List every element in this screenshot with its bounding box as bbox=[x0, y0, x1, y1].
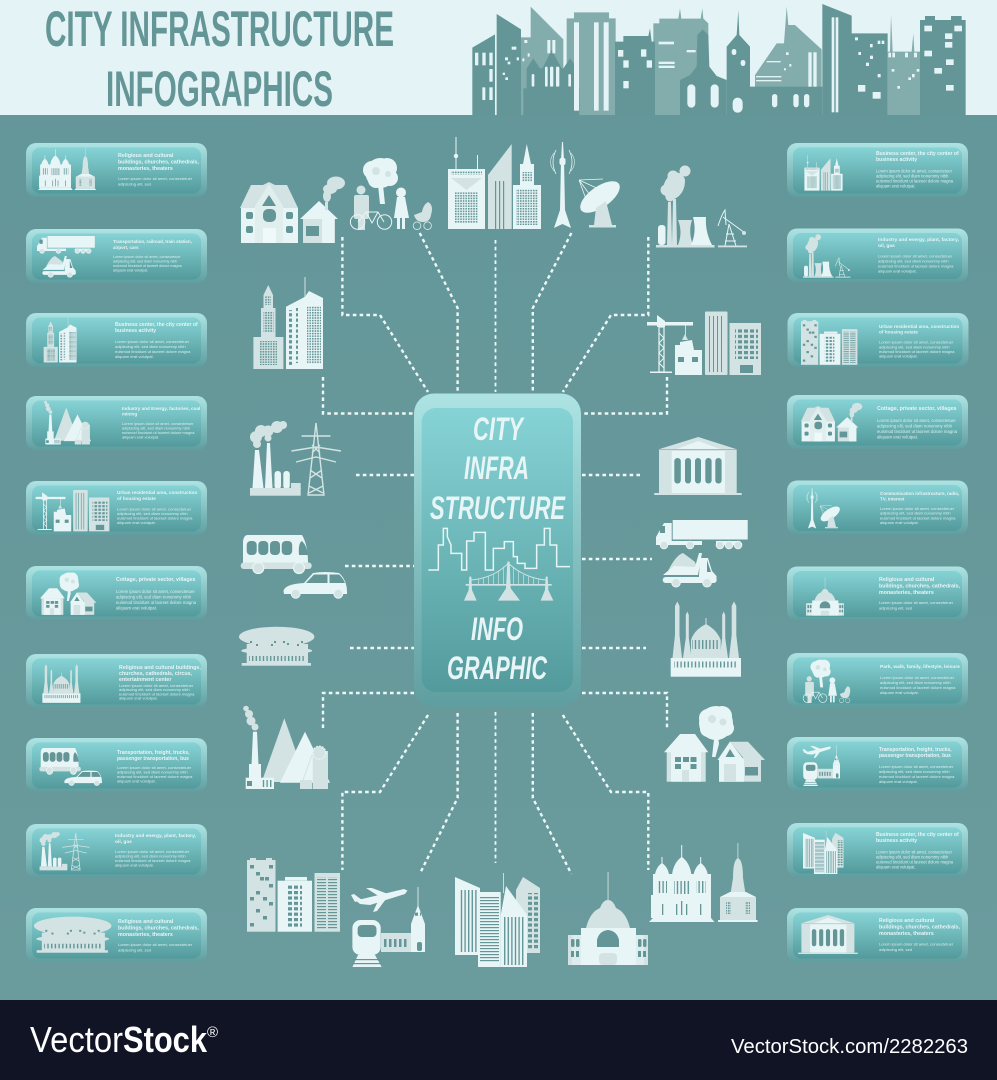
panel text: euismod tincidunt ut laoreet dolore magna bbox=[876, 860, 954, 864]
icon: temple bbox=[798, 915, 858, 954]
panel text: Lorem ipsum dolor sit amet, consectetuer bbox=[118, 176, 193, 181]
panel text: Lorem ipsum dolor sit amet, consectetuer bbox=[119, 683, 194, 688]
icon: cottage bbox=[801, 403, 862, 441]
panel text bbox=[113, 239, 192, 272]
icon: bus bbox=[241, 535, 312, 574]
panel text: Lorem ipsum dolor sit amet, consectetuer bbox=[878, 254, 953, 258]
icon: churches bbox=[649, 843, 758, 922]
panel text: aliquam erat volutpat. bbox=[115, 354, 154, 359]
icon: suspension bridge bbox=[464, 562, 553, 601]
panel text: Park, walk, family, lifestyle, leisure bbox=[880, 664, 960, 670]
panel: right 2 industry bbox=[787, 228, 968, 282]
panel text: euismod tincidunt ut laoreet dolore magna bbox=[113, 264, 183, 268]
panel text: Lorem ipsum dolor sit amet, consectetuer bbox=[880, 675, 955, 680]
panel text: Lorem ipsum dolor sit amet, consectetuer bbox=[879, 764, 954, 769]
icon: bus bbox=[39, 748, 81, 774]
panel text: euismod tincidunt ut laoreet dolore magna bbox=[117, 774, 193, 779]
icon: freight truck bbox=[37, 236, 95, 253]
title: INFOGRAPHICS bbox=[106, 61, 333, 117]
central heading text bbox=[430, 411, 566, 526]
footer bar bbox=[0, 1000, 997, 1080]
panel text: Industry and energy, plant, factory, bbox=[115, 833, 196, 839]
panel: left 1 religious bbox=[26, 143, 207, 197]
panel text bbox=[876, 832, 959, 870]
footer logo: ® bbox=[207, 1024, 218, 1041]
panel text: Lorem ipsum dolor sit amet, consectetuer bbox=[880, 506, 955, 511]
panel: right 8 transportation bbox=[787, 737, 968, 791]
panel text: euismod tincidunt ut laoreet dolore magna bbox=[877, 429, 958, 434]
panel text: adipiscing elit, sed diam nonummy nibh bbox=[116, 594, 192, 600]
footer logo: VectorStock bbox=[30, 1019, 221, 1060]
central subheading text: INFO bbox=[471, 611, 523, 647]
panel text: Industry and Energy, factories, coal bbox=[122, 406, 200, 411]
panel text bbox=[880, 664, 960, 695]
panel text: aliquam erat volutpat. bbox=[113, 268, 148, 272]
panel text: Urban residential area, construction bbox=[117, 490, 197, 495]
panel: right 9 business bbox=[787, 823, 968, 877]
panel text: euismod tincidunt ut laoreet dolore magna bbox=[122, 430, 195, 435]
panel text bbox=[117, 750, 193, 784]
panel text: business activity bbox=[115, 328, 156, 334]
panel text bbox=[880, 491, 959, 525]
icon: car bbox=[284, 572, 347, 598]
icon: plant and oil pump bbox=[656, 166, 747, 248]
panel text: aliquam erat volutpat. bbox=[119, 696, 158, 701]
panel text: passenger transportation, bus bbox=[879, 753, 951, 759]
panel text bbox=[119, 665, 201, 701]
panel: right 3 urban residential bbox=[788, 313, 968, 367]
panel text: adipiscing elit, sed diam nonummy nibh bbox=[119, 687, 190, 692]
icon: mosque bbox=[671, 602, 741, 677]
panel text: business activity bbox=[876, 157, 917, 163]
icon: stadium bbox=[239, 627, 314, 666]
panel text: Lorem ipsum dolor sit amet, consectetuer bbox=[113, 255, 181, 259]
panel: left 6 cottage bbox=[26, 566, 207, 620]
panel text: adipiscing elit, sed diam nonummy nibh bbox=[878, 258, 949, 264]
panel text: airport, cars bbox=[113, 245, 139, 250]
panel: right 10 religious bbox=[787, 908, 968, 962]
panel text: adipiscing elit, sed diam nonummy nibh bbox=[117, 511, 188, 516]
panel text: euismod tincidunt ut laoreet dolore magna bbox=[880, 515, 956, 520]
panel text: euismod tincidunt ut laoreet dolore magna bbox=[878, 264, 954, 268]
panel text: adipiscing elit, sed bbox=[118, 182, 151, 186]
header city skyline bbox=[472, 4, 966, 115]
icon: park, family bbox=[803, 660, 850, 703]
panel text: Lorem ipsum dolor sit amet, consectetuer bbox=[876, 168, 953, 174]
panel text: adipiscing elit, sed bbox=[118, 948, 151, 952]
title: CITY INFRASTRUCTURE bbox=[45, 1, 394, 57]
icon: business towers bbox=[804, 155, 843, 191]
panel text bbox=[122, 406, 200, 440]
panel text: adipiscing elit, sed bbox=[879, 947, 912, 952]
panel text bbox=[877, 406, 958, 440]
panel text: aliquam erat volutpat. bbox=[878, 268, 917, 274]
icon: business center towers bbox=[448, 137, 541, 229]
panel text: euismod tincidunt ut laoreet dolore magna bbox=[879, 774, 955, 779]
panel text: adipiscing elit, sed diam nonummy nibh bbox=[122, 426, 190, 430]
panel text: Lorem ipsum dolor sit amet, consectetuer bbox=[879, 942, 954, 946]
panel text: aliquam erat volutpat. bbox=[122, 434, 159, 440]
icon: tall business buildings bbox=[253, 277, 323, 369]
panel text bbox=[116, 577, 197, 610]
panel text: Religious and cultural bbox=[879, 918, 935, 924]
icon: crane and buildings bbox=[36, 490, 109, 531]
panel text bbox=[878, 237, 959, 274]
icon: power plant and pylon bbox=[250, 421, 341, 496]
icon: car bbox=[64, 771, 102, 786]
panel text: Cottage, private sector, villages bbox=[877, 406, 957, 412]
dashed connectors bbox=[323, 233, 667, 874]
panel text: monasteries, theaters bbox=[879, 931, 934, 937]
panel text: adipiscing elit, sed bbox=[879, 606, 912, 610]
panel: left 2 transportation bbox=[26, 229, 207, 283]
panel text bbox=[118, 153, 199, 186]
panel text: euismod tincidunt ut laoreet dolore magna bbox=[119, 691, 195, 696]
panel text: Religious and cultural bbox=[879, 577, 935, 583]
panel: right 7 park bbox=[787, 653, 968, 707]
panel text: monasteries, theaters bbox=[118, 166, 173, 172]
panel text bbox=[118, 919, 199, 952]
icon: communication tower and dish bbox=[806, 488, 842, 529]
panel text: aliquam erat volutpat. bbox=[117, 520, 156, 525]
panel text: adipiscing elit, sed diam nonummy nibh bbox=[879, 769, 950, 774]
panel text: adipiscing elit, sed diam nonummy nibh bbox=[880, 680, 951, 685]
panel text: Lorem ipsum dolor sit amet, consectetuer bbox=[116, 589, 195, 594]
central panel: city infrastructure infographic bbox=[414, 394, 581, 707]
icon: churches bbox=[38, 148, 96, 190]
icon: power plant and pylon bbox=[40, 832, 89, 870]
panel text: adipiscing elit, sed diam nonummy nibh bbox=[115, 854, 186, 858]
panel text: oil, gas bbox=[878, 243, 895, 249]
panel: right 4 cottage bbox=[787, 395, 968, 449]
panel text: Business center, the city center of bbox=[876, 151, 959, 157]
panel: left 3 business bbox=[26, 313, 207, 367]
panel text: entertainment center bbox=[119, 677, 171, 683]
central subheading text bbox=[447, 611, 548, 686]
panel text: Religious and cultural bbox=[118, 919, 174, 925]
panel text: buildings, churches, cathedrals, bbox=[879, 924, 960, 930]
panel text: monasteries, theaters bbox=[118, 932, 173, 938]
icon: stadium bbox=[34, 917, 111, 953]
panel text bbox=[876, 151, 959, 188]
panel text: Religious and cultural buildings, bbox=[119, 665, 201, 671]
panel text: passenger transportation, bus bbox=[117, 756, 189, 762]
panel: left 4 industry bbox=[26, 396, 207, 450]
panel text: Lorem ipsum dolor sit amet, consectetuer bbox=[115, 339, 190, 344]
icon: plant and oil pump bbox=[803, 234, 850, 278]
panel: left 9 industry and energy bbox=[26, 824, 207, 878]
icon: domed hall bbox=[568, 872, 648, 965]
panel text: aliquam erat volutpat. bbox=[880, 520, 919, 525]
icon: plane and train station bbox=[351, 887, 425, 967]
panel text: Lorem ipsum dolor sit amet, consectetuer bbox=[115, 849, 190, 854]
panel text: adipiscing elit, sed diam nonummy nibh bbox=[879, 344, 950, 349]
central heading text: CITY bbox=[473, 411, 525, 447]
panel text: aliquam erat volutpat. bbox=[876, 184, 916, 188]
panel text: euismod tincidunt ut laoreet dolore magna bbox=[117, 516, 193, 520]
icon: skyline outline bbox=[428, 528, 570, 570]
panel text bbox=[115, 322, 198, 359]
panel text: Urban residential area, construction bbox=[879, 324, 959, 329]
panel text bbox=[879, 747, 955, 784]
panel text: euismod tincidunt ut laoreet dolore magna bbox=[880, 685, 956, 690]
panel text: monasteries, theaters bbox=[879, 590, 934, 596]
icon: freight truck bbox=[656, 520, 748, 549]
panel text bbox=[879, 324, 959, 359]
panel text: Lorem ipsum dolor sit amet, consectetuer bbox=[879, 600, 954, 605]
panel text: churches, cathedrals, circus, bbox=[119, 671, 193, 677]
icon: tall business buildings bbox=[44, 317, 77, 363]
panel text: adipiscing elit, sed diam nonummy nibh bbox=[115, 344, 186, 349]
icon: plane and train station bbox=[803, 746, 840, 786]
panel text: aliquam erat volutpat. bbox=[879, 354, 918, 359]
footer image reference: VectorStock.com/2282263 bbox=[731, 1036, 968, 1058]
panel text: buildings, churches, cathedrals, bbox=[879, 584, 960, 590]
panel text: aliquam erat volutpat. bbox=[880, 690, 919, 695]
panel text: Business center, the city center of bbox=[876, 832, 959, 838]
panel text: adipiscing elit, sed diam nonummy nibh bbox=[113, 260, 177, 264]
central heading text: INFRA bbox=[464, 450, 529, 486]
panel text: adipiscing elit, sed diam nonummy nibh bbox=[880, 511, 951, 516]
panel text: Lorem ipsum dolor sit amet, consectetuer bbox=[876, 850, 953, 854]
icon: dump truck bbox=[42, 256, 76, 277]
panel text: euismod tincidunt ut laoreet dolore magna bbox=[116, 600, 197, 605]
icon: park, family with bicycle and pram bbox=[350, 158, 432, 230]
panel: left 7 religious circus bbox=[26, 654, 207, 708]
panel text: Lorem ipsum dolor sit amet, consectetuer bbox=[879, 340, 954, 344]
panel text: oil, gas bbox=[115, 839, 132, 845]
panel: left 8 passenger transport bbox=[26, 738, 207, 792]
icon: dump truck bbox=[663, 553, 717, 587]
panel text: buildings, churches, cathedrals, bbox=[118, 160, 199, 166]
icon: communication tower and dish bbox=[550, 142, 625, 228]
panel text: Transportation, railroad, train station, bbox=[113, 239, 192, 244]
panel: right 1 business bbox=[787, 143, 968, 197]
panel text: Communication infrastructure, radio, bbox=[880, 491, 959, 496]
panel text: Cottage, private sector, villages bbox=[116, 577, 196, 583]
panel: left 10 stadium bbox=[26, 908, 207, 962]
panel text: euismod tincidunt ut laoreet dolore magna bbox=[876, 178, 954, 184]
icon: coal mining bbox=[243, 706, 330, 789]
title bbox=[45, 1, 394, 117]
panel text: aliquam erat volutpat. bbox=[876, 864, 916, 870]
panel text: Lorem ipsum dolor sit amet, consectetuer bbox=[117, 506, 192, 512]
panel text: euismod tincidunt ut laoreet dolore magna bbox=[115, 349, 191, 354]
central heading text: STRUCTURE bbox=[430, 490, 566, 526]
icon: houses and tree bbox=[40, 573, 96, 615]
panel text: mining bbox=[122, 412, 137, 416]
panel text: of housing estate bbox=[879, 330, 918, 334]
panel: right 5 communication bbox=[787, 480, 968, 534]
panel text: of housing estate bbox=[117, 496, 156, 501]
panel text: aliquam erat volutpat. bbox=[879, 779, 918, 784]
panel text: Lorem ipsum dolor sit amet, consectetuer bbox=[122, 421, 194, 426]
icon: houses and tree bbox=[664, 706, 765, 782]
panel text bbox=[117, 490, 197, 525]
central subheading text: GRAPHIC bbox=[447, 650, 548, 686]
icon: coal mining bbox=[44, 401, 91, 444]
panel text: aliquam erat volutpat. bbox=[117, 778, 156, 784]
panel text: TV, Internet bbox=[880, 496, 905, 502]
icon: cottage and small house bbox=[240, 176, 345, 243]
icon: domed hall bbox=[806, 577, 844, 616]
panel text: aliquam erat volutpat. bbox=[877, 434, 918, 440]
panel: right 6 religious bbox=[787, 566, 968, 620]
panel text: adipiscing elit, sed diam nonummy nibh bbox=[876, 854, 949, 860]
panel text: Lorem ipsum dolor sit amet, consectetuer bbox=[117, 765, 192, 770]
panel text: euismod tincidunt ut laoreet dolore magna bbox=[115, 858, 191, 863]
icon: residential blocks bbox=[247, 858, 340, 932]
panel text: business activity bbox=[876, 838, 917, 844]
panel text: Religious and cultural bbox=[118, 153, 174, 159]
icon: residential blocks bbox=[801, 320, 857, 365]
panel text bbox=[115, 833, 196, 868]
icon: skyscrapers bbox=[803, 831, 844, 874]
panel text: Transportation, freight, trucks, bbox=[117, 750, 190, 756]
panel text: adipiscing elit, sed diam nonummy nibh bbox=[876, 174, 949, 178]
header band bbox=[0, 0, 997, 117]
panel text: buildings, churches, cathedrals, bbox=[118, 926, 199, 932]
panel text: aliquam erat volutpat. bbox=[115, 862, 154, 868]
panel text: adipiscing elit, sed diam nonummy nibh bbox=[877, 424, 953, 428]
panel text: Business center, the city center of bbox=[115, 322, 198, 328]
icon: mosque bbox=[42, 664, 80, 703]
panel text: Transportation, freight, trucks, bbox=[879, 747, 952, 753]
panel text: Industry and energy, plant, factory, bbox=[878, 237, 959, 243]
panel text: aliquam erat volutpat. bbox=[116, 606, 157, 610]
panel text: Lorem ipsum dolor sit amet, consectetuer bbox=[118, 942, 193, 947]
panel text bbox=[879, 918, 960, 952]
panel text: euismod tincidunt ut laoreet dolore magna bbox=[879, 349, 955, 354]
icon: crane and residential construction bbox=[647, 312, 761, 375]
panel text bbox=[879, 577, 960, 610]
panel text: Lorem ipsum dolor sit amet, consectetuer bbox=[877, 418, 956, 423]
icon: skyscrapers bbox=[455, 873, 540, 967]
icon: temple bbox=[654, 437, 742, 495]
panel text: adipiscing elit, sed diam nonummy nibh bbox=[117, 770, 188, 774]
panel: left 5 urban residential bbox=[26, 481, 207, 535]
